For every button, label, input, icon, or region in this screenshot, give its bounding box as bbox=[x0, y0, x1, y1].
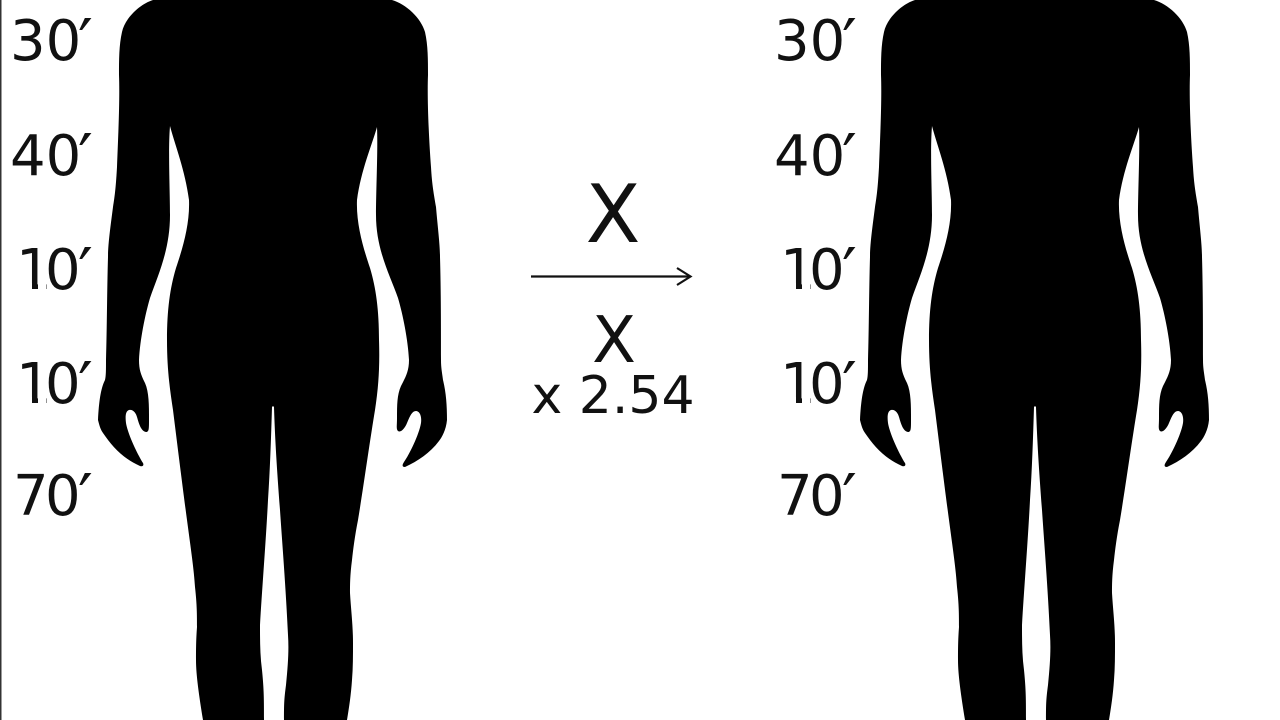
conversion bottom X: X bbox=[592, 304, 636, 378]
right measurement labels: 7 bbox=[777, 464, 813, 529]
left measurement labels: 1 bbox=[16, 352, 52, 417]
right measurement labels: 40 bbox=[774, 124, 845, 189]
left body silhouette bbox=[98, 0, 447, 720]
left measurement labels: ′ bbox=[78, 5, 93, 82]
left measurement labels: ′ bbox=[78, 234, 93, 311]
left measurement labels: ′ bbox=[78, 348, 93, 425]
left measurement labels: ′ bbox=[78, 120, 93, 197]
right body silhouette bbox=[860, 0, 1209, 720]
left measurement labels: ′ bbox=[78, 460, 93, 537]
left measurement labels: 1 bbox=[16, 238, 52, 303]
right measurement labels: ′ bbox=[842, 5, 857, 82]
left measurement labels: 0 bbox=[45, 238, 81, 303]
left measurement labels: 0 bbox=[45, 464, 81, 529]
right measurement labels: 0 bbox=[809, 238, 845, 303]
right measurement labels: 30 bbox=[774, 9, 845, 74]
right measurement labels: ′ bbox=[842, 460, 857, 537]
right measurement labels: 0 bbox=[809, 464, 845, 529]
right measurement labels: 1 bbox=[780, 238, 816, 303]
left measurement labels: 30 bbox=[10, 9, 81, 74]
right measurement labels: ′ bbox=[842, 348, 857, 425]
conversion factor: x 2.54 bbox=[531, 366, 695, 426]
left measurement labels bbox=[10, 5, 93, 537]
conversion top X: X bbox=[586, 168, 640, 261]
right measurement labels: ′ bbox=[842, 120, 857, 197]
right measurement labels: 0 bbox=[809, 352, 845, 417]
left measurement labels: 40 bbox=[10, 124, 81, 189]
right measurement labels: 1 bbox=[780, 352, 816, 417]
left measurement labels: 0 bbox=[45, 352, 81, 417]
right measurement labels bbox=[774, 5, 857, 537]
conversion arrow bbox=[531, 268, 690, 285]
left measurement labels: 7 bbox=[13, 464, 49, 529]
right measurement labels: ′ bbox=[842, 234, 857, 311]
